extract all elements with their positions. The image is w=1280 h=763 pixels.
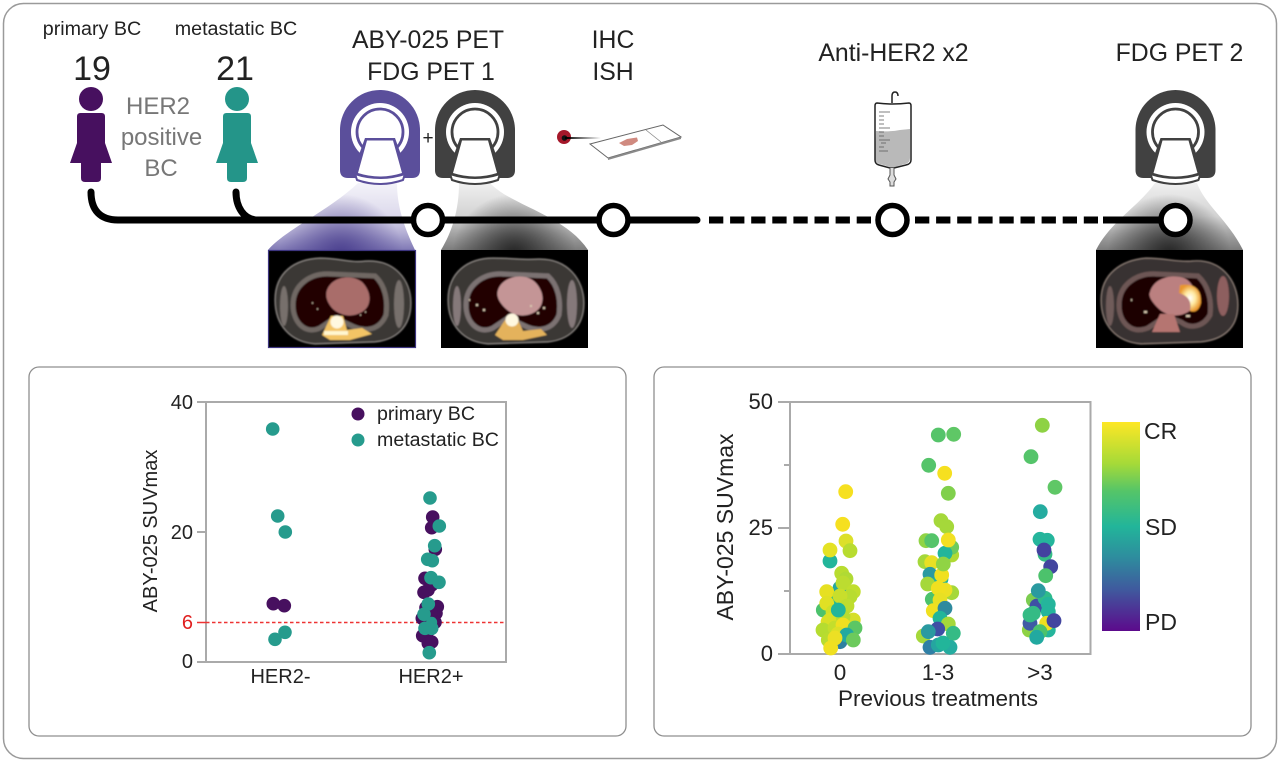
x tick labels: 1-3 [922,660,954,685]
image: FDG PET 2 scan [1096,250,1243,348]
icon: biopsy tissue and slide [557,125,681,160]
heading: IHC ISH: IHC [592,27,634,54]
projection cone: ABY-025 PET [268,183,415,250]
heading: metastatic BC: metastatic BC [175,18,297,40]
heading: Anti-HER2 x2: Anti-HER2 x2 [818,40,969,67]
panel: left chart frame [29,367,626,736]
icon: purple PET scanner [340,90,420,184]
x axis title: Previous treatments [838,686,1038,711]
text: HER2 positive BC: BC [144,155,178,182]
axes [197,402,506,662]
colour scale [1102,418,1177,635]
teal data points [266,422,446,660]
heading: FDG PET 2: FDG PET 2 [1116,40,1243,67]
timepoint markers [414,206,1190,234]
y tick labels [171,392,193,673]
image: FDG PET 1 scan [441,250,588,348]
x tick labels: 0 [834,660,846,685]
data points: more than 3 previous treatments [1022,418,1062,645]
colour scale: SD [1145,514,1177,540]
heading: primary BC: primary BC [43,18,141,40]
data points: 0 previous treatments [816,484,862,655]
data points: 1-3 previous treatments [916,427,961,655]
panel: right chart frame [654,367,1251,736]
legend [352,403,499,451]
x tick labels [834,660,1053,685]
text: HER2 positive BC: HER2 [126,93,190,120]
threshold dashes [206,622,506,624]
projection cone: FDG PET 2 [1096,183,1243,250]
timeline [91,192,1190,234]
icon: infusion bag [875,92,911,186]
text: HER2 positive BC [121,93,202,182]
x tick labels: >3 [1027,660,1053,685]
projection cone: FDG PET 1 [441,183,588,250]
y tick labels [749,389,773,666]
y tick labels: 40 [171,392,193,414]
icon: grey PET scanner 2 [1136,90,1216,184]
chart: ABY-025 SUVmax by HER2 status [140,392,506,688]
x tick labels: HER2+ [398,666,464,688]
y tick labels: 25 [749,515,773,540]
y axis title: ABY-025 SUVmax [712,433,738,621]
y axis title: ABY-025 SUVmax [140,450,162,612]
heading: ABY-025 PET and FDG PET 1: FDG PET 1 [367,59,495,86]
legend: primary BC [377,403,475,425]
heading: ABY-025 PET and FDG PET 1: ABY-025 PET [352,27,504,54]
axes [778,402,1090,654]
chart: ABY-025 SUVmax by previous treatments [712,389,1177,711]
count: 19: 19 [73,50,111,88]
y tick labels: 0 [182,651,193,673]
icon: metastatic patient [216,87,258,182]
image: ABY-025 PET scan [268,250,416,348]
heading: IHC ISH: ISH [592,59,634,86]
y tick labels: 50 [749,389,773,414]
icon: plus sign: + [422,128,434,149]
colour scale: PD [1145,609,1177,635]
y tick labels: 6 [182,612,193,634]
count: 21: 21 [216,50,254,88]
y tick labels: 0 [761,641,773,666]
icon: grey PET scanner 1 [435,90,515,184]
threshold tick [197,622,206,624]
icon: primary patient [70,87,112,182]
text: HER2 positive BC: positive [121,124,202,151]
x tick labels [250,666,464,688]
y tick labels: 20 [171,522,193,544]
x tick labels: HER2- [250,666,311,688]
heading: ABY-025 PET and FDG PET 1 [352,27,504,86]
heading: IHC ISH [592,27,634,86]
purple data points [266,510,444,650]
colour scale: CR [1144,418,1177,444]
legend: metastatic BC [377,429,499,451]
